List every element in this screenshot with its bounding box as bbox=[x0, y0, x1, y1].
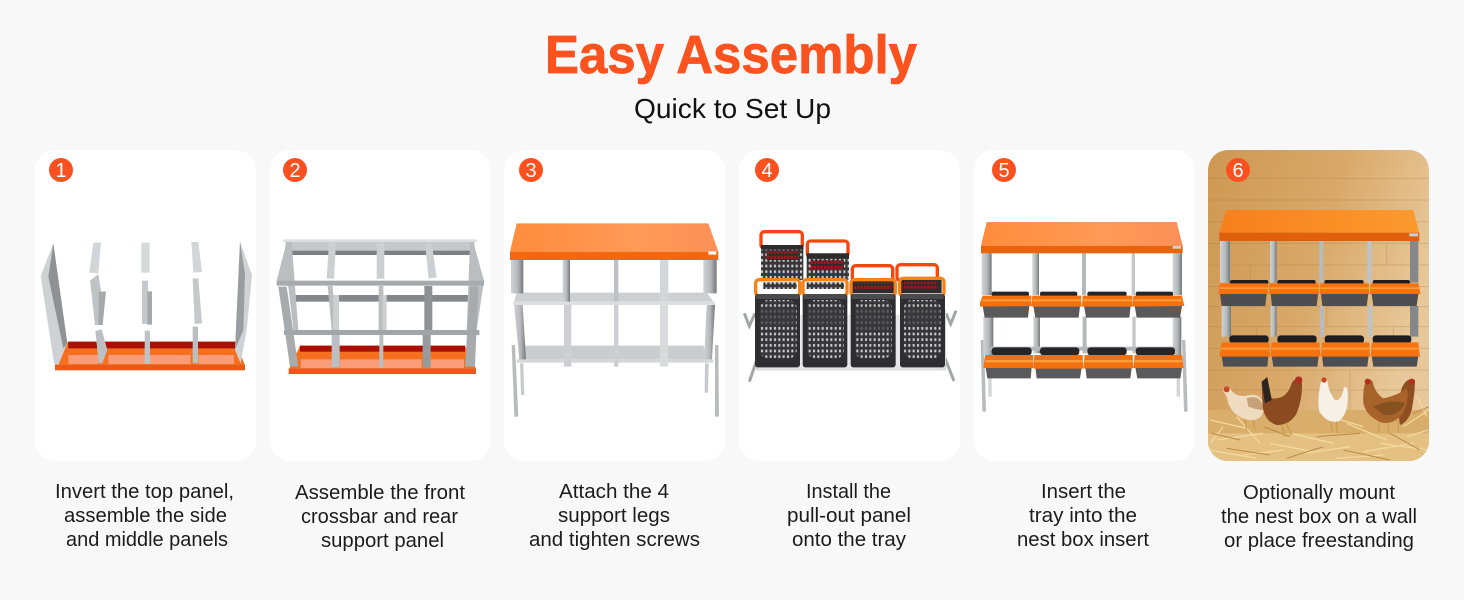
panel: step 3 bbox=[504, 150, 725, 461]
caption 2: support panel bbox=[321, 530, 444, 552]
chicken: white hen bbox=[1318, 377, 1348, 433]
badge 1 bbox=[49, 158, 73, 182]
badge 5 bbox=[992, 158, 1016, 182]
badge 5: 5 bbox=[998, 160, 1010, 182]
panel: step 5 bbox=[974, 150, 1195, 461]
caption 4: Install the bbox=[806, 481, 891, 503]
caption 2: crossbar and rear bbox=[301, 506, 458, 528]
photo scene: mounted nest box with chickens bbox=[1208, 150, 1429, 462]
caption 1: and middle panels bbox=[66, 529, 228, 551]
panel: step 1 bbox=[35, 150, 256, 461]
title: Easy Assembly bbox=[545, 25, 917, 85]
caption 1: Invert the top panel, bbox=[55, 481, 234, 503]
caption 5 bbox=[1017, 481, 1149, 551]
caption 3: support legs bbox=[558, 505, 670, 527]
caption 3: and tighten screws bbox=[529, 529, 700, 551]
caption 4: onto the tray bbox=[792, 529, 906, 551]
caption 5: Insert the bbox=[1041, 481, 1126, 503]
caption 3 bbox=[529, 481, 700, 551]
caption 4: pull-out panel bbox=[787, 505, 911, 527]
panel: step 4 bbox=[739, 150, 960, 461]
illustration: pull-out baskets on tray bbox=[744, 232, 956, 382]
illustration: frame with roof and legs bbox=[510, 223, 719, 417]
badge 6: 6 bbox=[1232, 160, 1244, 182]
caption 6: Optionally mount bbox=[1243, 482, 1395, 504]
badge 3 bbox=[519, 158, 543, 182]
chicken: brown hen with dark tail bbox=[1262, 376, 1302, 437]
panel: step 2 bbox=[270, 150, 491, 461]
chicken: brown hen front bbox=[1363, 379, 1408, 434]
caption 5: tray into the bbox=[1029, 505, 1137, 527]
badge 3: 3 bbox=[525, 160, 537, 182]
caption 6 bbox=[1221, 482, 1417, 552]
card 2 bbox=[270, 150, 491, 461]
caption 2: Assemble the front bbox=[295, 482, 465, 504]
chicken: brown hen behind bbox=[1399, 379, 1415, 425]
illustration: nest box with trays bbox=[980, 222, 1188, 412]
subtitle: Quick to Set Up bbox=[634, 93, 831, 124]
caption 2 bbox=[295, 482, 465, 552]
caption 1 bbox=[55, 481, 234, 551]
caption 1: assemble the side bbox=[64, 505, 227, 527]
card 4 bbox=[739, 150, 960, 461]
illustration: frame with crossbars bbox=[277, 239, 484, 374]
illustration: tray with side and middle panels bbox=[41, 242, 252, 370]
caption 4 bbox=[787, 481, 911, 551]
caption 3: Attach the 4 bbox=[559, 481, 669, 503]
panel: step 6 bbox=[1208, 150, 1429, 462]
chicken: cream hen bbox=[1223, 386, 1263, 429]
badge 4: 4 bbox=[761, 160, 773, 182]
badge 2 bbox=[283, 158, 307, 182]
card 5 bbox=[974, 150, 1195, 461]
caption 6: the nest box on a wall bbox=[1221, 506, 1417, 528]
badge 6 bbox=[1226, 158, 1250, 182]
caption 5: nest box insert bbox=[1017, 529, 1149, 551]
badge 1: 1 bbox=[55, 160, 67, 182]
chickens bbox=[1223, 376, 1415, 437]
card 1 bbox=[35, 150, 256, 461]
card 3 bbox=[504, 150, 725, 461]
badge 2: 2 bbox=[289, 160, 301, 182]
caption 6: or place freestanding bbox=[1224, 530, 1414, 552]
badge 4 bbox=[755, 158, 779, 182]
